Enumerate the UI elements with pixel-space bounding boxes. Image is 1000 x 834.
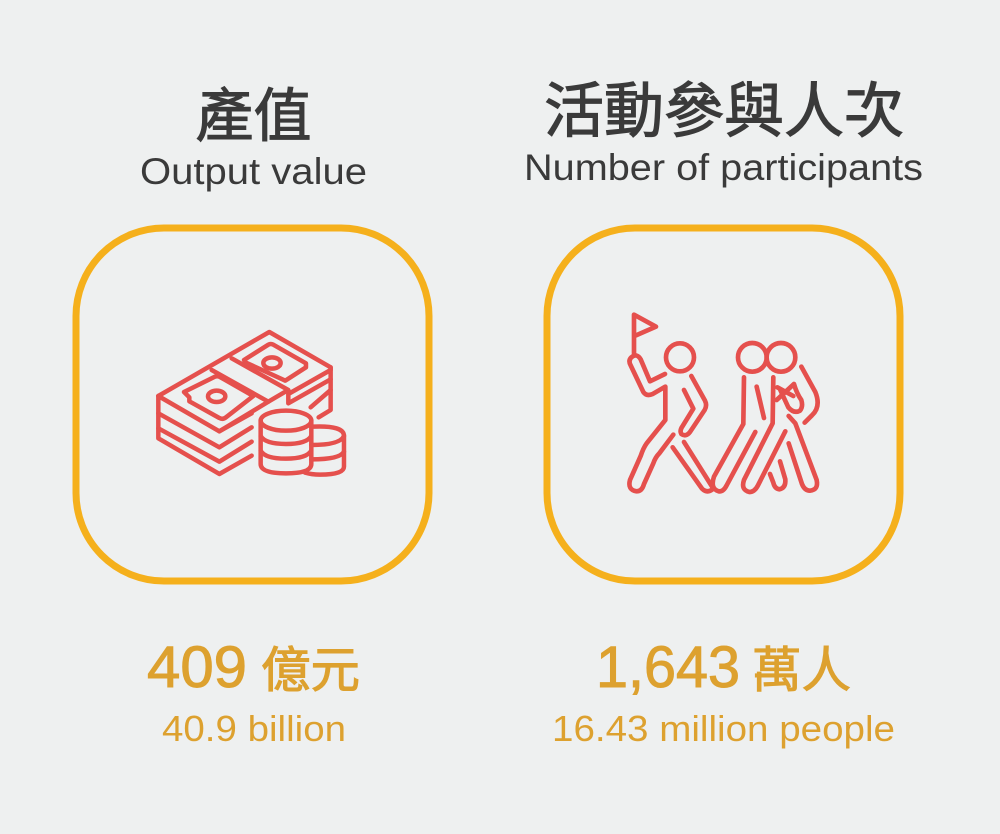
panel: output value icon frame: [76, 228, 429, 581]
stat: participants: 1,643: [596, 635, 740, 700]
heading: output value: [140, 69, 367, 192]
panel: participants icon frame: [547, 228, 900, 581]
stat: output value: 40.9 billion: [162, 708, 346, 749]
stat: participants: 16.43 million people: [552, 708, 895, 749]
stat: output value: [147, 631, 360, 749]
icon: banknotes and coins: [158, 332, 344, 475]
stat: output value: 億元: [261, 631, 360, 702]
stat: participants: 萬人: [752, 631, 851, 702]
icon: walking group with flag: [629, 315, 818, 492]
heading: number of participants: 活動參與人次: [544, 63, 904, 150]
heading: output value: Output value: [140, 151, 367, 192]
heading: number of participants: Number of participants: [524, 147, 923, 188]
heading: output value: 產值: [195, 69, 312, 153]
stat: output value: 409: [147, 635, 247, 700]
heading: number of participants: [524, 63, 923, 188]
stat: participants: [552, 631, 895, 749]
